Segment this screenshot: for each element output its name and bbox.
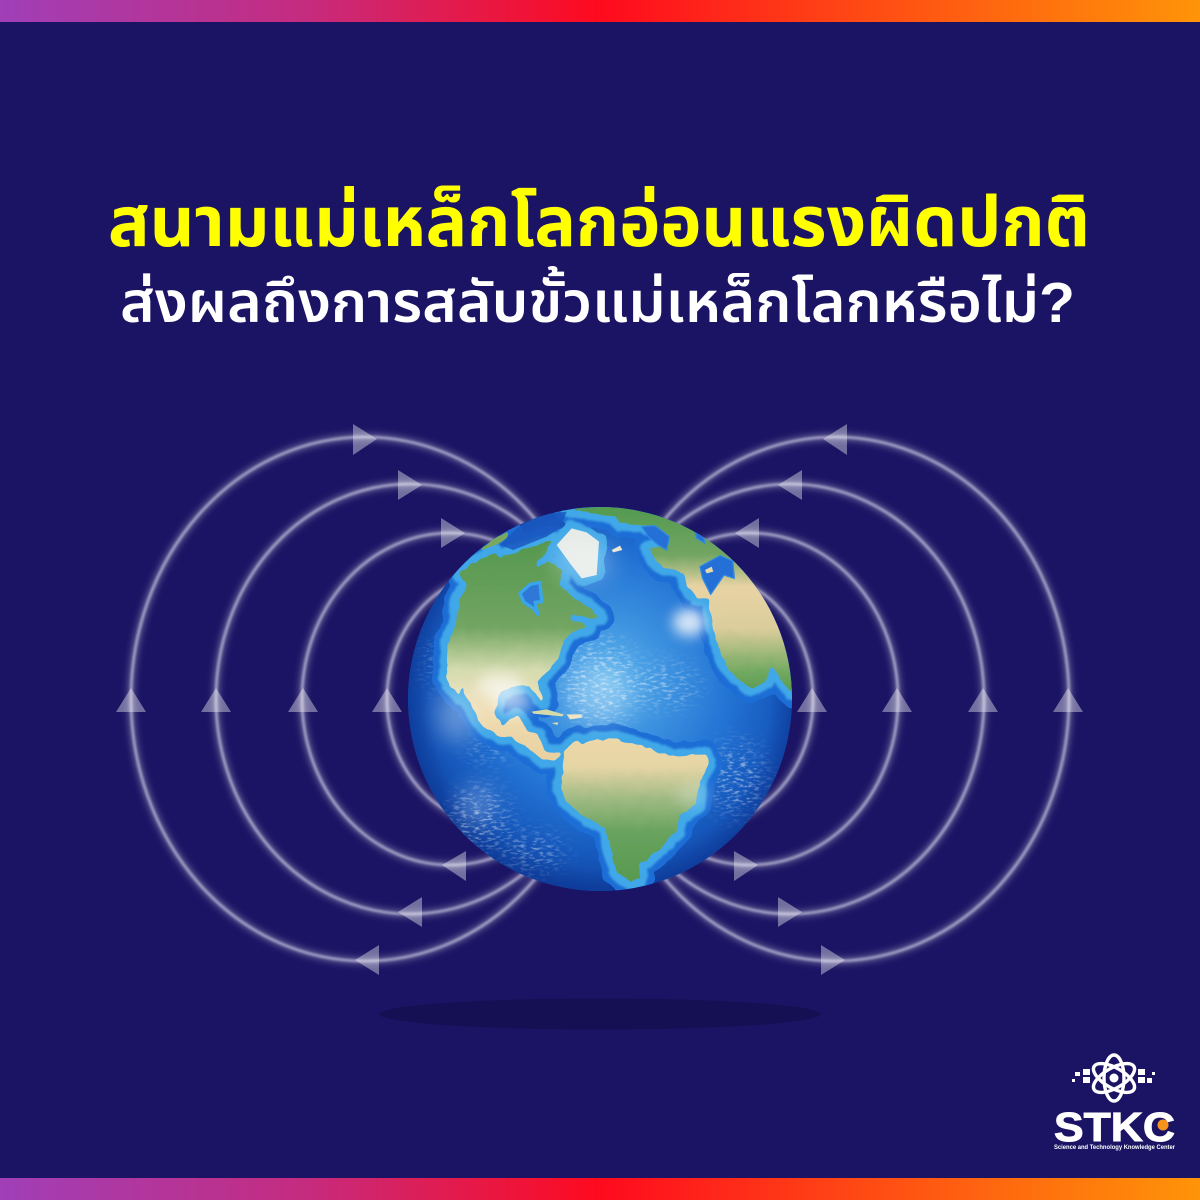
title line 2: ส่งผลถึงการสลับขั้วแม่เหล็กโลกหรือไม่? [120,265,1075,335]
logo: STKC [1054,1055,1176,1151]
logo atom icon [1089,1055,1139,1101]
logo tagline: Science and Technology Knowledge Center [1054,1145,1176,1151]
ground shadow [379,998,821,1030]
continental shelves [447,507,793,882]
Greenland [557,528,599,578]
Europe and Africa [568,507,793,693]
title line 1: สนามแม่เหล็กโลกอ่อนแรงผิดปกติ [108,183,1090,261]
Caribbean islands [532,709,563,716]
Hudson Bay [520,582,542,614]
field direction arrows [116,424,1083,975]
logo orange dot [1158,1120,1168,1130]
logo pixel squares [1072,1069,1155,1083]
Alaska strip [480,532,508,550]
ocean brush texture [416,630,776,881]
title [108,183,1090,335]
land masses [447,507,793,882]
bottom gradient bar [0,1178,1200,1200]
South America [560,738,708,882]
Italian peninsula [705,567,713,573]
ocean [408,507,792,891]
North America [447,540,600,760]
cloud highlights [437,542,710,825]
main illustration canvas [110,186,1175,1150]
magnetic field lines [131,437,1069,961]
Mediterranean and northern seas [642,526,734,594]
top gradient bar [0,0,1200,22]
Iceland [612,546,622,552]
ocean rim shading [407,506,793,892]
logo wordmark: STKC [1054,1104,1175,1150]
northern dark channel [500,512,567,550]
globe [400,495,800,895]
